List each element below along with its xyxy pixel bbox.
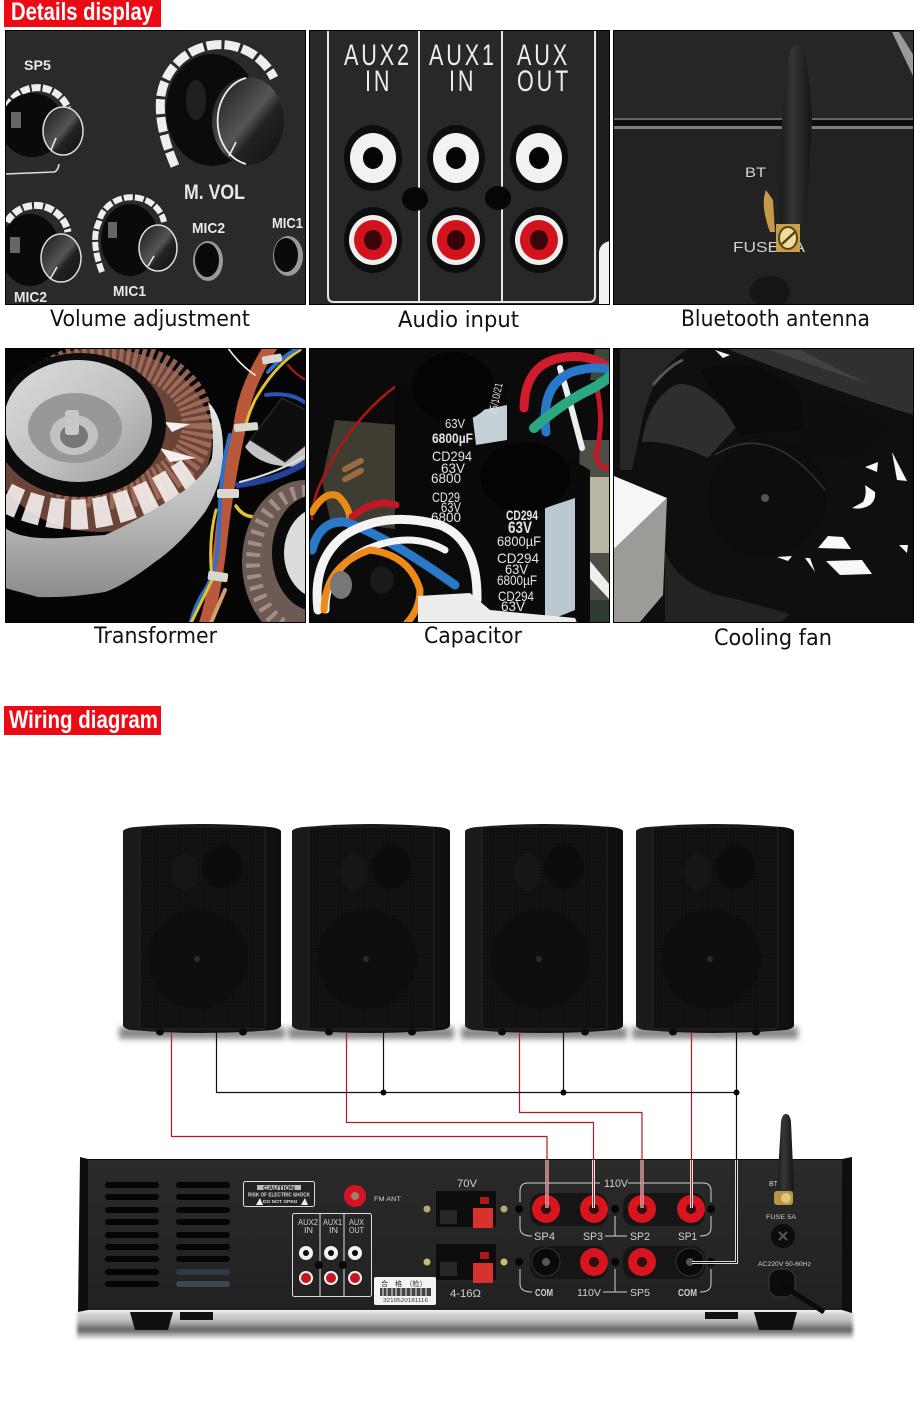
panel frame: [310, 348, 610, 622]
panel: transformer photo: [6, 349, 305, 622]
AUX input block: AUX: [349, 1218, 365, 1227]
corner reflection: [892, 32, 914, 78]
ventilation slots: [105, 1182, 230, 1287]
labels: IN: [365, 63, 392, 98]
knob: MIC2: MIC2: [14, 289, 47, 306]
70V / 4-16Ω terminal blocks: [424, 1178, 508, 1300]
capacitor 2: 63V: [501, 598, 526, 614]
jack: MIC2: [192, 220, 225, 281]
AUX input block: AUX1: [323, 1218, 342, 1227]
caption: Volume adjustment: Volume adjustment: [50, 307, 250, 332]
white gaps: [715, 350, 908, 575]
knob: master volume: M. VOL: [184, 181, 245, 204]
labels: AUX: [517, 37, 570, 72]
certificate sticker: 3210520181116: [383, 1298, 428, 1304]
wiring: common black wires: [216, 1032, 740, 1262]
speaker terminal group: 110V: [604, 1178, 629, 1190]
small transformer box: [245, 440, 305, 467]
panel: bluetooth antenna photo: [613, 30, 914, 308]
lower left wires: [312, 495, 477, 625]
amplifier rear panel: [78, 1157, 852, 1313]
panel: bluetooth antenna photo: FUSE 5A: [733, 239, 805, 256]
speaker terminal group: COM: [535, 1287, 553, 1299]
resistors: [342, 458, 364, 482]
knob: MIC1: MIC1: [113, 283, 146, 300]
knob: MIC2: [0, 205, 81, 306]
speaker terminal group: [515, 1178, 715, 1299]
capacitor 1: 63V: [445, 416, 465, 431]
70V / 4-16Ω terminal blocks: 4-16Ω: [450, 1288, 481, 1300]
corner highlight: [599, 241, 609, 304]
capacitor 2: [498, 464, 590, 622]
speaker 1: [119, 824, 285, 1039]
capacitor 2: 6800µF: [497, 533, 541, 549]
speaker terminal group: SP2: [630, 1231, 650, 1243]
fuse holder: [750, 276, 790, 304]
white panel outline: [328, 30, 595, 302]
top right wires: [524, 356, 612, 468]
panel frame: [310, 30, 610, 304]
white insulation tape: [5, 402, 223, 597]
capacitor 1: 63V: [441, 460, 466, 476]
FM antenna socket: [344, 1185, 401, 1207]
AUX input block: IN: [329, 1226, 338, 1235]
icon: antenna: [764, 46, 812, 252]
panel: cooling fan photo: [613, 348, 914, 623]
screws: [402, 186, 511, 211]
fan blades: [642, 364, 890, 623]
speaker terminal group: 110V: [577, 1287, 601, 1299]
fuse and power: AC220V 50-60Hz: [758, 1261, 811, 1268]
speaker terminal group: COM: [678, 1287, 697, 1299]
FM antenna socket: FM ANT: [374, 1196, 401, 1203]
caution label: CAUTION: [263, 1186, 295, 1192]
speaker 3: [461, 824, 627, 1039]
panel frame: [6, 30, 306, 304]
chassis print: BT: [745, 164, 767, 180]
knob: SP5: SP5: [24, 57, 51, 73]
capacitor 1: 63V: [441, 499, 462, 515]
panel frame: [6, 348, 306, 622]
labels: [344, 44, 568, 92]
capacitor 2: CD294: [498, 588, 534, 604]
speaker 2: [288, 824, 454, 1039]
knob: SP5: [0, 57, 83, 157]
panel: audio input photo: [309, 30, 610, 305]
AUX input block: AUX2: [298, 1218, 319, 1227]
panel frame: [614, 30, 914, 304]
second toroid: [242, 480, 305, 622]
caption: Bluetooth antenna: Bluetooth antenna: [681, 307, 870, 332]
white ribbon cable: [418, 593, 578, 625]
caution label: DO NOT OPEN: [263, 1199, 297, 1204]
caption: Capacitor: Capacitor: [424, 624, 523, 649]
knob: MIC1: [95, 197, 177, 300]
AUX input block: IN: [304, 1226, 313, 1235]
AUX input block: OUT: [349, 1226, 364, 1235]
certificate sticker: [374, 1277, 436, 1305]
capacitor 2: CD294: [506, 507, 538, 523]
capacitor 1: 6800µF: [432, 430, 473, 446]
speaker terminal group: SP1: [678, 1231, 697, 1243]
speaker terminal group: SP3: [583, 1231, 603, 1243]
jack: MIC1: [272, 215, 303, 276]
70V / 4-16Ω terminal blocks: 70V: [457, 1178, 478, 1190]
icon: bluetooth antenna on amplifier: [774, 1114, 794, 1205]
panel: capacitor photo: [309, 348, 612, 625]
amplifier feet: [130, 1312, 797, 1330]
RCA jacks: white row: [344, 125, 568, 191]
amplifier shadow: [77, 1311, 853, 1339]
labels: OUT: [517, 63, 571, 98]
jack: MIC1: MIC1: [272, 215, 303, 232]
circuit board: [322, 420, 395, 529]
RCA jacks: red row: [344, 207, 568, 273]
knob: master volume: [160, 45, 284, 204]
capacitor 1: 6800: [431, 509, 461, 525]
capacitor 1: 6800: [431, 470, 461, 486]
fan frame: [620, 348, 690, 470]
chassis ledge: [613, 118, 914, 129]
cable ties: [207, 353, 283, 582]
labels: AUX2: [344, 37, 412, 72]
caution label: [244, 1182, 314, 1206]
speaker terminal group: SP5: [630, 1287, 650, 1299]
speaker terminal group: SP4: [534, 1231, 555, 1243]
capacitor 1: CD29: [432, 489, 460, 505]
large toroid windings: [0, 348, 212, 532]
certificate sticker: 合 格 （检）: [381, 1279, 426, 1289]
capacitor 1: 25/10/21: [487, 382, 506, 416]
caption: Audio input: Audio input: [398, 308, 519, 333]
heading: Wiring diagram: Wiring diagram: [9, 706, 158, 734]
panel frame: [614, 348, 914, 622]
jack: MIC2: MIC2: [192, 220, 225, 237]
small capacitors on board: [330, 566, 394, 599]
capacitor 2: 6800µF: [497, 572, 537, 588]
fan hub: [686, 418, 848, 578]
metal box: [614, 476, 667, 622]
wiring: positive red wires: [172, 1032, 692, 1208]
fuse and power: FUSE 5A: [766, 1214, 797, 1221]
capacitor 2: CD294: [497, 550, 539, 566]
caption: Cooling fan: Cooling fan: [714, 626, 832, 651]
capacitor 2: 63V: [505, 561, 529, 577]
caption: Transformer: Transformer: [93, 624, 218, 649]
mark under SP5: [5, 164, 59, 174]
caution label: RISK OF ELECTRIC SHOCK: [248, 1192, 310, 1198]
panel: volume adjustment photo: [0, 30, 306, 306]
labels: IN: [449, 63, 476, 98]
metal disc: [0, 353, 166, 497]
fuse and power: BT: [769, 1181, 779, 1188]
wiring: white halo for wires over amp: [547, 1160, 736, 1262]
capacitor 1: CD294: [432, 448, 472, 464]
fuse and power: [758, 1181, 824, 1312]
labels: AUX1: [429, 37, 497, 72]
AUX input block: [292, 1213, 372, 1297]
red lead: [312, 386, 396, 520]
wire bundle: [190, 345, 306, 625]
capacitor 1: [395, 384, 507, 530]
capacitor 2: 63V: [508, 518, 533, 537]
speaker 4: [632, 824, 798, 1039]
